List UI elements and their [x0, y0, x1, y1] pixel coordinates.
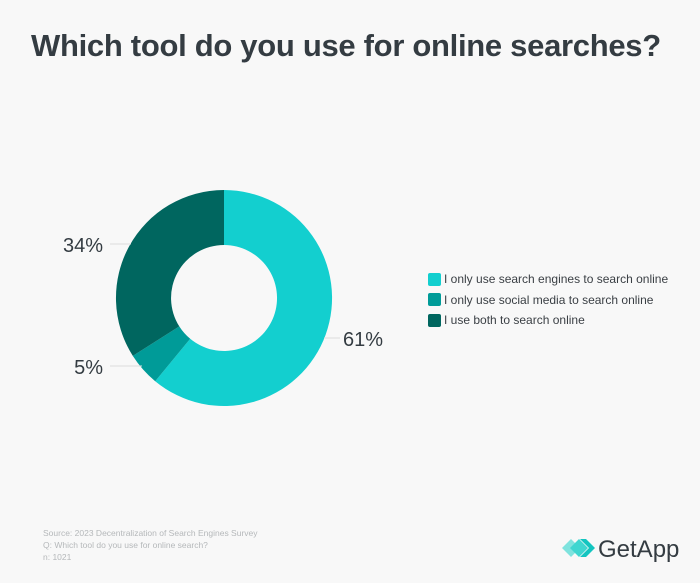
- logo: GetApp: [562, 536, 679, 563]
- legend: I only use search engines to search online: [444, 272, 668, 286]
- label: 61%: 61%: [343, 329, 383, 351]
- logo: GetApp: GetApp: [598, 536, 679, 563]
- label: 5%: 5%: [74, 357, 103, 379]
- source note: [43, 528, 258, 562]
- label: 34%: 34%: [63, 235, 103, 257]
- label: 61%: [324, 329, 383, 351]
- source note: Source: 2023 Decentralization of Search Engines Survey: [43, 528, 258, 538]
- source note: n: 1021: [43, 552, 71, 562]
- segment: search engines 61%: [155, 190, 332, 406]
- legend: I only use social media to search online: [444, 293, 653, 307]
- source note: Q: Which tool do you use for online search?: [43, 540, 208, 550]
- label: 34%: [63, 235, 131, 257]
- legend: [428, 272, 668, 327]
- segment: both 34%: [116, 190, 224, 356]
- title: Which tool do you use for online searches?: [31, 28, 661, 63]
- label: 5%: [74, 357, 142, 379]
- legend: I use both to search online: [444, 313, 585, 327]
- segment: social media 5%: [133, 326, 190, 381]
